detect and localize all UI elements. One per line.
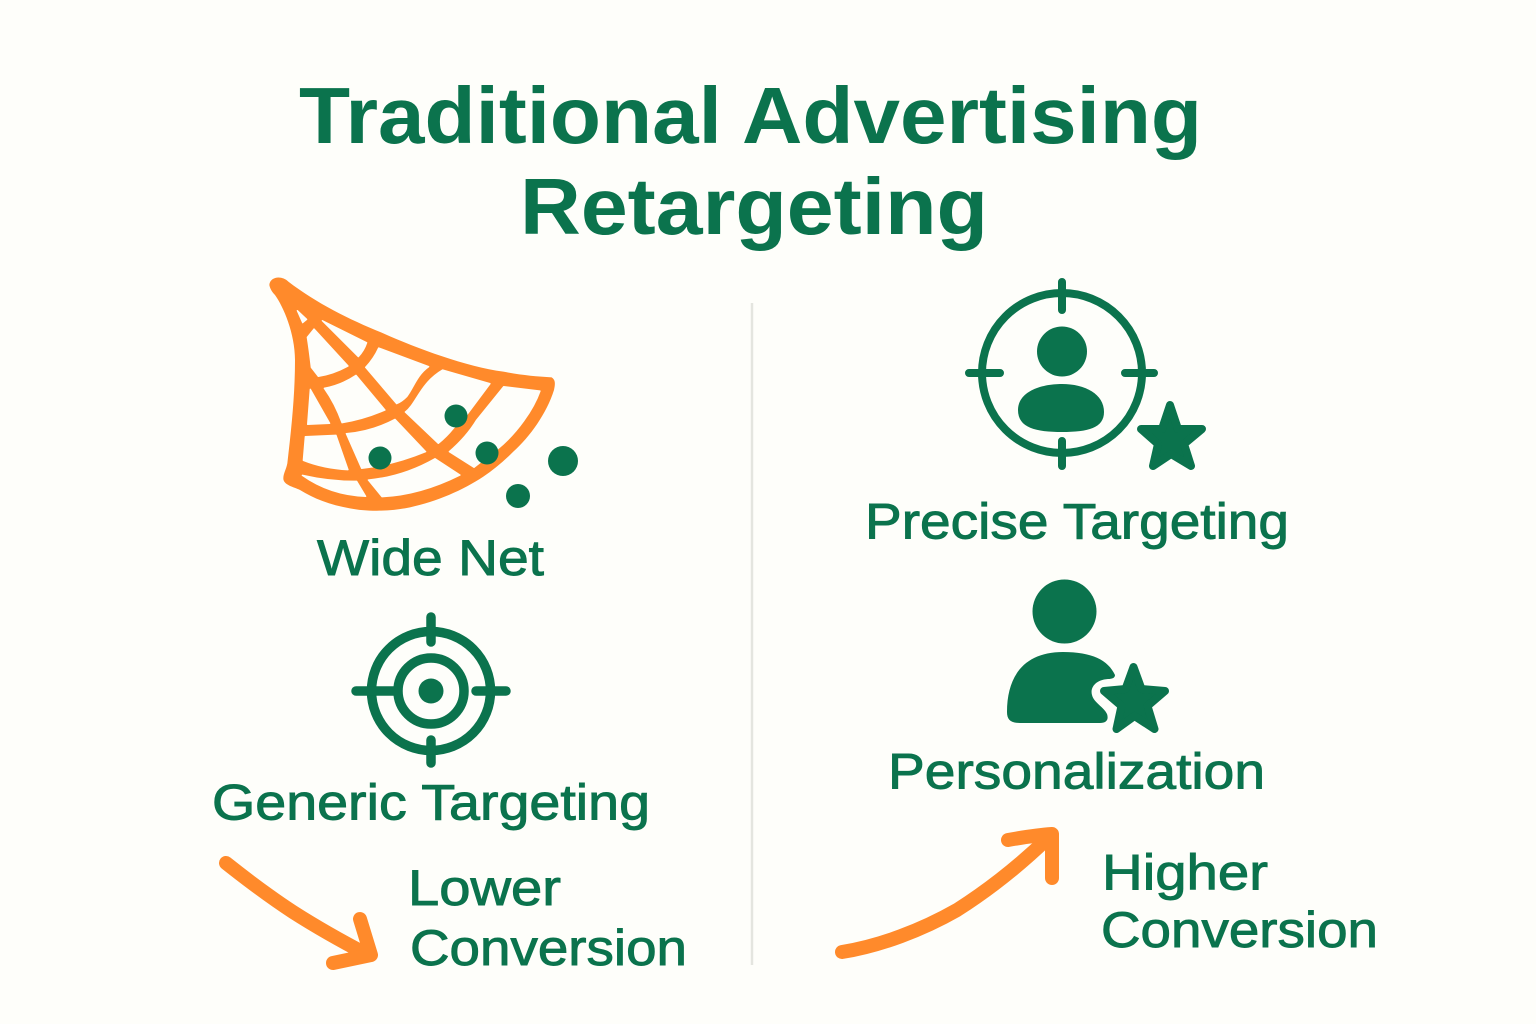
icon: generic target bbox=[356, 617, 506, 763]
label: precise targeting: Precise Targeting bbox=[865, 494, 1289, 550]
title: Retargeting bbox=[520, 162, 988, 251]
panel: traditional advertising bbox=[212, 278, 687, 976]
arrow: up bbox=[842, 834, 1052, 952]
panel: retargeting bbox=[842, 282, 1378, 958]
label: higher conversion: Conversion bbox=[1101, 902, 1378, 958]
label: generic targeting: Generic Targeting bbox=[212, 774, 650, 830]
label: lower conversion: Conversion bbox=[410, 920, 687, 976]
label: lower conversion: Lower bbox=[408, 860, 561, 916]
label: higher conversion bbox=[1101, 844, 1378, 958]
icon: person with star bbox=[1007, 580, 1165, 729]
label: wide net: Wide Net bbox=[317, 530, 544, 586]
label: higher conversion: Higher bbox=[1102, 844, 1268, 900]
label: personalization: Personalization bbox=[888, 744, 1265, 800]
icon: wide net with dots bbox=[269, 278, 578, 511]
title: Traditional Advertising bbox=[299, 71, 1202, 160]
label: lower conversion bbox=[408, 860, 687, 976]
arrow: down bbox=[226, 863, 371, 963]
title bbox=[299, 71, 1202, 251]
icon: precise target with person and star bbox=[969, 282, 1202, 466]
